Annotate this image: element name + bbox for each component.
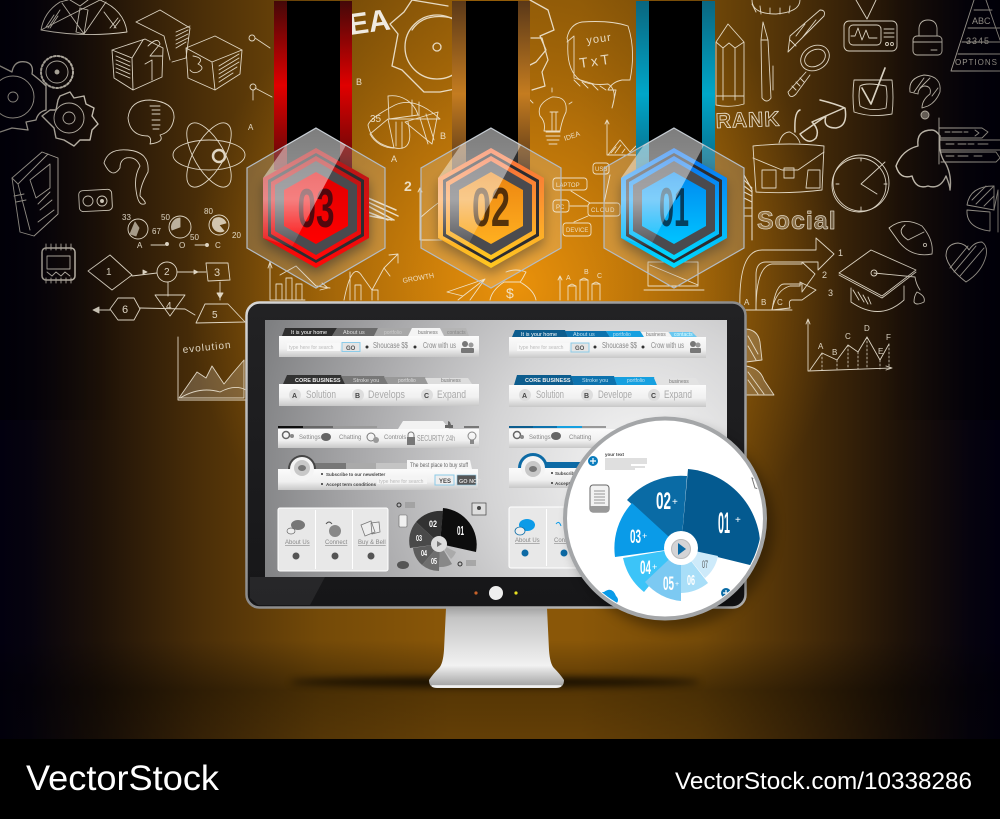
device mind map: LAPTOP	[556, 183, 580, 189]
icon: options pyramid	[951, 0, 1000, 71]
percent donut labels: 80	[204, 207, 213, 216]
nav bar 1 grey: type here for search	[289, 345, 334, 351]
icon: padlock	[913, 20, 942, 55]
flowchart numbers: 5	[212, 310, 218, 321]
wedge numbers: +	[672, 497, 678, 508]
nav bar 2 blue: Develope	[598, 389, 632, 401]
cards panel blue: About Us	[515, 538, 540, 544]
nav bar 1 blue: Shoucase $$	[602, 341, 637, 350]
screen	[265, 320, 727, 577]
ribbon 02	[452, 1, 530, 170]
wedge 06	[681, 562, 708, 593]
icon: pie chart	[356, 77, 446, 164]
pie chart grey: 03	[416, 534, 422, 543]
subscribe bar grey: The best place to buy stuff	[410, 463, 468, 469]
monitor	[246, 302, 746, 688]
nav bar 1 grey: portfolio	[384, 330, 402, 336]
pie chart grey: 04	[421, 549, 427, 558]
icon: pie chart: B	[356, 77, 362, 87]
toolbar 3 blue: Settings	[529, 435, 551, 441]
nav bar 2 blue: CORE BUSINESS	[525, 378, 571, 384]
subscribe bar grey: Subscribe to our newsletter	[326, 472, 386, 477]
cards panel blue: Connect	[554, 538, 577, 544]
nav bar 1 blue: type here for search	[519, 345, 564, 351]
wedge numbers: 01	[718, 507, 730, 540]
chart: line chart ABCDEF: F	[886, 333, 891, 342]
icon: book	[12, 152, 58, 236]
percent donut labels: A	[137, 241, 143, 250]
lettering: Social: Social	[757, 207, 837, 235]
chart: line chart ABCDEF: E	[878, 347, 883, 356]
numeral and notes near orange hexagon: 2	[404, 178, 412, 194]
flowchart numbers: 6	[122, 304, 128, 316]
toolbar 3 grey: Settings	[299, 435, 321, 441]
wedge 02	[627, 476, 687, 536]
icon: coin stack	[752, 0, 800, 14]
nav bar 2 blue: business	[669, 379, 689, 385]
flowchart numbers	[106, 267, 220, 321]
icon: tag labels	[939, 118, 1000, 164]
icon: 3D bar chart: C	[597, 273, 602, 280]
icon: cloud blue	[602, 590, 618, 603]
percent donut labels	[122, 207, 241, 250]
icon: heart	[946, 242, 986, 282]
monitor body	[246, 302, 746, 608]
icon: big gear	[390, 0, 554, 92]
nav bar 2 blue: portfolio	[627, 378, 645, 384]
nav bar 2 grey: Develops	[368, 389, 405, 401]
icon: atom	[173, 116, 245, 194]
nav bar 1 grey: Crow with us	[423, 341, 456, 350]
wedge 04	[623, 550, 669, 592]
nav bar 2 grey: B	[355, 393, 360, 400]
icon: speech bubble your text	[567, 22, 633, 108]
nav bar 2 blue: A	[522, 393, 527, 400]
icon: options pyramid: OPTIONS	[955, 58, 998, 67]
nav bar 2 blue: Solution	[536, 389, 564, 401]
cards panel blue	[509, 507, 589, 568]
icon: computer mouse	[889, 221, 932, 255]
right column UI (blue)	[509, 330, 706, 568]
lens background	[560, 415, 770, 625]
icon: percent donuts	[128, 215, 229, 246]
nav bar 2 grey: Expand	[437, 389, 466, 401]
nav bar 1 blue: About us	[573, 332, 595, 338]
nav bar 2 grey: C	[424, 393, 429, 400]
nav bar 2 blue: Stroke you	[582, 378, 608, 384]
nav bar 2 blue: Expand	[664, 389, 692, 401]
footer url text: VectorStock.com/10338286	[675, 768, 972, 795]
pie centre play button	[664, 531, 698, 565]
nav bar 2 grey: business	[441, 378, 461, 384]
wedge numbers	[630, 488, 741, 595]
arrow labels: 1	[838, 248, 843, 258]
device mind map: CLOUD	[591, 208, 615, 214]
nav bar 2 blue	[509, 375, 706, 407]
caption text lines	[605, 452, 647, 469]
subscribe bar grey: type here for search	[379, 479, 424, 485]
wedge numbers: +	[675, 581, 679, 588]
icon: wall clock	[832, 155, 889, 212]
nav bar 2 blue: C	[651, 393, 656, 400]
nav bar 1 blue: Crow with us	[651, 341, 684, 350]
wedge numbers: +	[735, 515, 741, 526]
nav bar 1 blue: It is your home	[521, 332, 557, 338]
icon: speech bubble with list	[128, 100, 174, 144]
icon: speech bubble your text: your	[586, 32, 613, 47]
wedge 05	[645, 560, 681, 601]
icon: briefcase	[753, 132, 824, 193]
flowchart numbers: 1	[106, 267, 112, 278]
cards panel grey: Buy & Bell	[358, 540, 386, 546]
flowchart numbers: 2	[164, 267, 170, 278]
cards panel grey: About Us	[285, 540, 310, 546]
watermark footer band	[0, 739, 1000, 819]
pie chart grey: 05	[431, 557, 437, 566]
numeral and notes near orange hexagon	[404, 178, 450, 240]
sketch doodles: right cluster	[740, 0, 1000, 395]
icon: eyeglasses	[795, 100, 846, 141]
icon: suit and tie	[41, 0, 127, 35]
badge 02: orange hexagon with ribbon	[421, 1, 561, 288]
badge 03: red hexagon with ribbon	[247, 1, 385, 288]
arrow labels: 2	[822, 270, 827, 280]
icon: paper plane and money bag: $	[506, 285, 514, 301]
nav bar 1 grey: Shoucase $$	[373, 341, 408, 350]
device mind map	[553, 163, 620, 236]
sketch doodles: left cluster	[0, 0, 602, 400]
nav bar 1 grey: About us	[343, 330, 365, 336]
arrow labels: C	[777, 298, 783, 307]
nav bar 1 grey: GO	[346, 346, 356, 352]
cards panel grey	[278, 508, 388, 571]
caption text lines: your text	[605, 452, 625, 457]
icon: graduation cap	[839, 250, 924, 312]
percent donut labels: 50	[190, 233, 199, 242]
hexagon 03	[247, 128, 385, 288]
icon: numbered cubes	[112, 10, 242, 90]
background: floor darkening	[0, 640, 1000, 740]
nav bar 1 grey: It is your home	[291, 330, 327, 336]
lens drop shadow	[570, 425, 774, 629]
floor shadow under monitor	[290, 677, 700, 687]
lens contents	[588, 453, 760, 603]
percent donut labels: 67	[152, 227, 161, 236]
subscribe bar grey	[278, 455, 481, 490]
profile icon corner	[752, 478, 759, 489]
icon: pie chart: 35	[370, 114, 382, 125]
icon: question mark	[104, 150, 148, 204]
icon: light bulb: IDEA	[563, 131, 581, 143]
icon: gear right tail	[531, 38, 548, 90]
icon: three direction arrows	[740, 238, 834, 310]
toolbar 3 blue	[509, 426, 619, 448]
subscribe bar grey: GO NOT	[459, 479, 481, 485]
icon: GO tag	[78, 189, 113, 212]
pie chart grey: 01	[457, 523, 464, 538]
chart: line chart ABCDEF: C	[845, 332, 851, 341]
nav bar 2 blue: B	[584, 393, 589, 400]
nav bar 1 blue: business	[646, 332, 666, 338]
percent donut labels: C	[215, 241, 221, 250]
icon: crayon	[788, 10, 824, 52]
wedge 07	[692, 552, 718, 578]
chart: line chart ABCDEF: D	[864, 324, 870, 333]
subscribe bar blue: Subscribe	[555, 471, 577, 476]
toolbar 3 grey: Controls	[384, 435, 406, 441]
pie chart grey	[397, 502, 486, 571]
icon: pie chart: A	[391, 154, 397, 164]
hexagon 01: 01	[659, 176, 689, 238]
percent donut labels: 20	[232, 231, 241, 240]
nav bar 2 grey: Stroke you	[353, 378, 379, 384]
bar chart doodles under hexagon: GROWTH	[402, 273, 435, 285]
wedge 03	[614, 503, 668, 557]
labels at left of pie: sketchy dots: A	[248, 123, 254, 132]
icon: partial pie	[967, 186, 998, 232]
hexagon 03: 03	[298, 177, 334, 239]
wedge numbers: +	[652, 562, 657, 572]
wedge numbers: 05	[663, 574, 674, 595]
ribbon 03	[274, 1, 352, 170]
nav bar 1 grey: contacts	[447, 330, 466, 336]
icon: microchip	[42, 244, 75, 283]
percent donut labels: 50	[161, 213, 170, 222]
wedge numbers: +	[642, 531, 647, 541]
device mind map: USB	[595, 167, 607, 173]
arrow labels: A	[744, 298, 750, 307]
icon: 3D bar chart	[558, 269, 602, 300]
icon: 3D bar chart: A	[566, 275, 571, 282]
icon: pencil	[716, 24, 744, 106]
pie chart grey: 02	[429, 519, 437, 529]
lens ring	[565, 418, 765, 618]
hexagon 02	[421, 128, 561, 288]
device mind map: PC	[556, 205, 565, 211]
icon: question mark hatch	[910, 75, 940, 119]
wedge 01	[681, 469, 760, 567]
monitor stand	[429, 608, 564, 688]
sketch doodles: top centre cluster	[248, 0, 781, 290]
icon: pie chart: B	[440, 131, 446, 141]
icon: open book right of hexagons	[368, 175, 752, 240]
nav bar 1 grey	[279, 328, 479, 357]
icon: retro tv	[844, 0, 897, 51]
nav bar 1 blue: contacts	[674, 332, 693, 338]
chart: line chart ABCDEF	[806, 319, 892, 371]
flowchart numbers: 3	[214, 267, 220, 279]
wedge numbers: 03	[630, 527, 641, 548]
device mind map: DEVICE	[566, 228, 588, 234]
icon: document	[590, 485, 609, 512]
wedge numbers: 02	[656, 488, 671, 515]
icon: tall pencil	[761, 22, 773, 101]
icon: check box	[853, 68, 893, 116]
chart: line chart ABCDEF: B	[832, 348, 837, 357]
magnifying lens callout	[560, 415, 774, 629]
arrow labels: B	[761, 298, 766, 307]
nav bar 1 blue	[509, 330, 706, 358]
toolbar 3 grey: Chatting	[339, 435, 361, 441]
chart: evolution doodle: evolution	[182, 340, 232, 356]
wedge numbers: 04	[640, 558, 651, 579]
nav bar 2 grey: CORE BUSINESS	[295, 378, 341, 384]
percent donut labels: O	[179, 241, 185, 250]
nav bar 2 grey: Solution	[306, 389, 336, 401]
nav bar 2 grey	[279, 375, 479, 406]
icon: people doodle right of monitor	[746, 329, 774, 395]
toolbar 3 grey: SECURITY 24h	[417, 434, 455, 443]
plus icon bottom	[721, 588, 730, 596]
hexagon 01	[604, 128, 744, 288]
icon: 3D bar chart: B	[584, 269, 589, 276]
bezel gloss	[250, 577, 325, 605]
subscribe bar blue	[509, 453, 585, 488]
hexagon 02: 02	[472, 176, 510, 238]
footer background	[0, 739, 1000, 819]
monitor indicator lights	[474, 586, 518, 600]
percent donut labels: 33	[122, 213, 131, 222]
wedge numbers: 06	[687, 572, 695, 589]
toolbar 3 grey	[278, 421, 479, 448]
nav bar 1 blue: portfolio	[613, 332, 631, 338]
labels at left of pie: sketchy dots	[248, 35, 272, 132]
icon: light bulb	[530, 88, 581, 144]
toolbar 3 blue: Chatting	[569, 435, 591, 441]
lettering: RANK: RANK	[715, 108, 781, 133]
wedge numbers: 07	[702, 559, 708, 571]
ribbon 01	[636, 1, 715, 170]
bar chart doodles under hexagon	[268, 254, 435, 300]
icon: options pyramid: 3345	[966, 36, 990, 46]
cards panel grey: Connect	[325, 540, 348, 546]
icon: paper plane and money bag	[447, 270, 536, 301]
badge 01: blue hexagon with ribbon	[604, 1, 744, 288]
flowchart numbers: 4	[166, 301, 172, 312]
nav bar 2 grey: A	[292, 393, 297, 400]
subscribe bar blue: Accept	[555, 481, 571, 486]
subscribe bar grey: YES	[439, 479, 451, 485]
big IDEA lettering: EA	[346, 3, 392, 42]
left column UI (grey)	[278, 328, 486, 571]
arrow labels	[744, 248, 843, 307]
flowchart	[88, 255, 245, 323]
plus icon top	[588, 456, 598, 466]
icon: speech bubble your text: TxT	[578, 51, 613, 71]
chart: evolution doodle	[178, 337, 246, 400]
subscribe bar grey: Accept term conditions	[326, 482, 377, 487]
icon: cloud	[896, 130, 950, 190]
chart: line chart ABCDEF: A	[818, 342, 824, 351]
icon: options pyramid: ABC	[972, 16, 991, 26]
icon: magnifying glass	[788, 40, 834, 97]
icon: cog wheels	[0, 56, 98, 146]
nav bar 1 blue: GO	[575, 346, 585, 352]
nav bar 1 grey: business	[418, 330, 438, 336]
icon: laptop under blue hexagon	[644, 262, 704, 290]
nav bar 2 grey: portfolio	[398, 378, 416, 384]
arrow labels: 3	[828, 288, 833, 298]
footer logo text: VectorStock	[26, 759, 220, 798]
icon: small chart	[605, 120, 640, 155]
